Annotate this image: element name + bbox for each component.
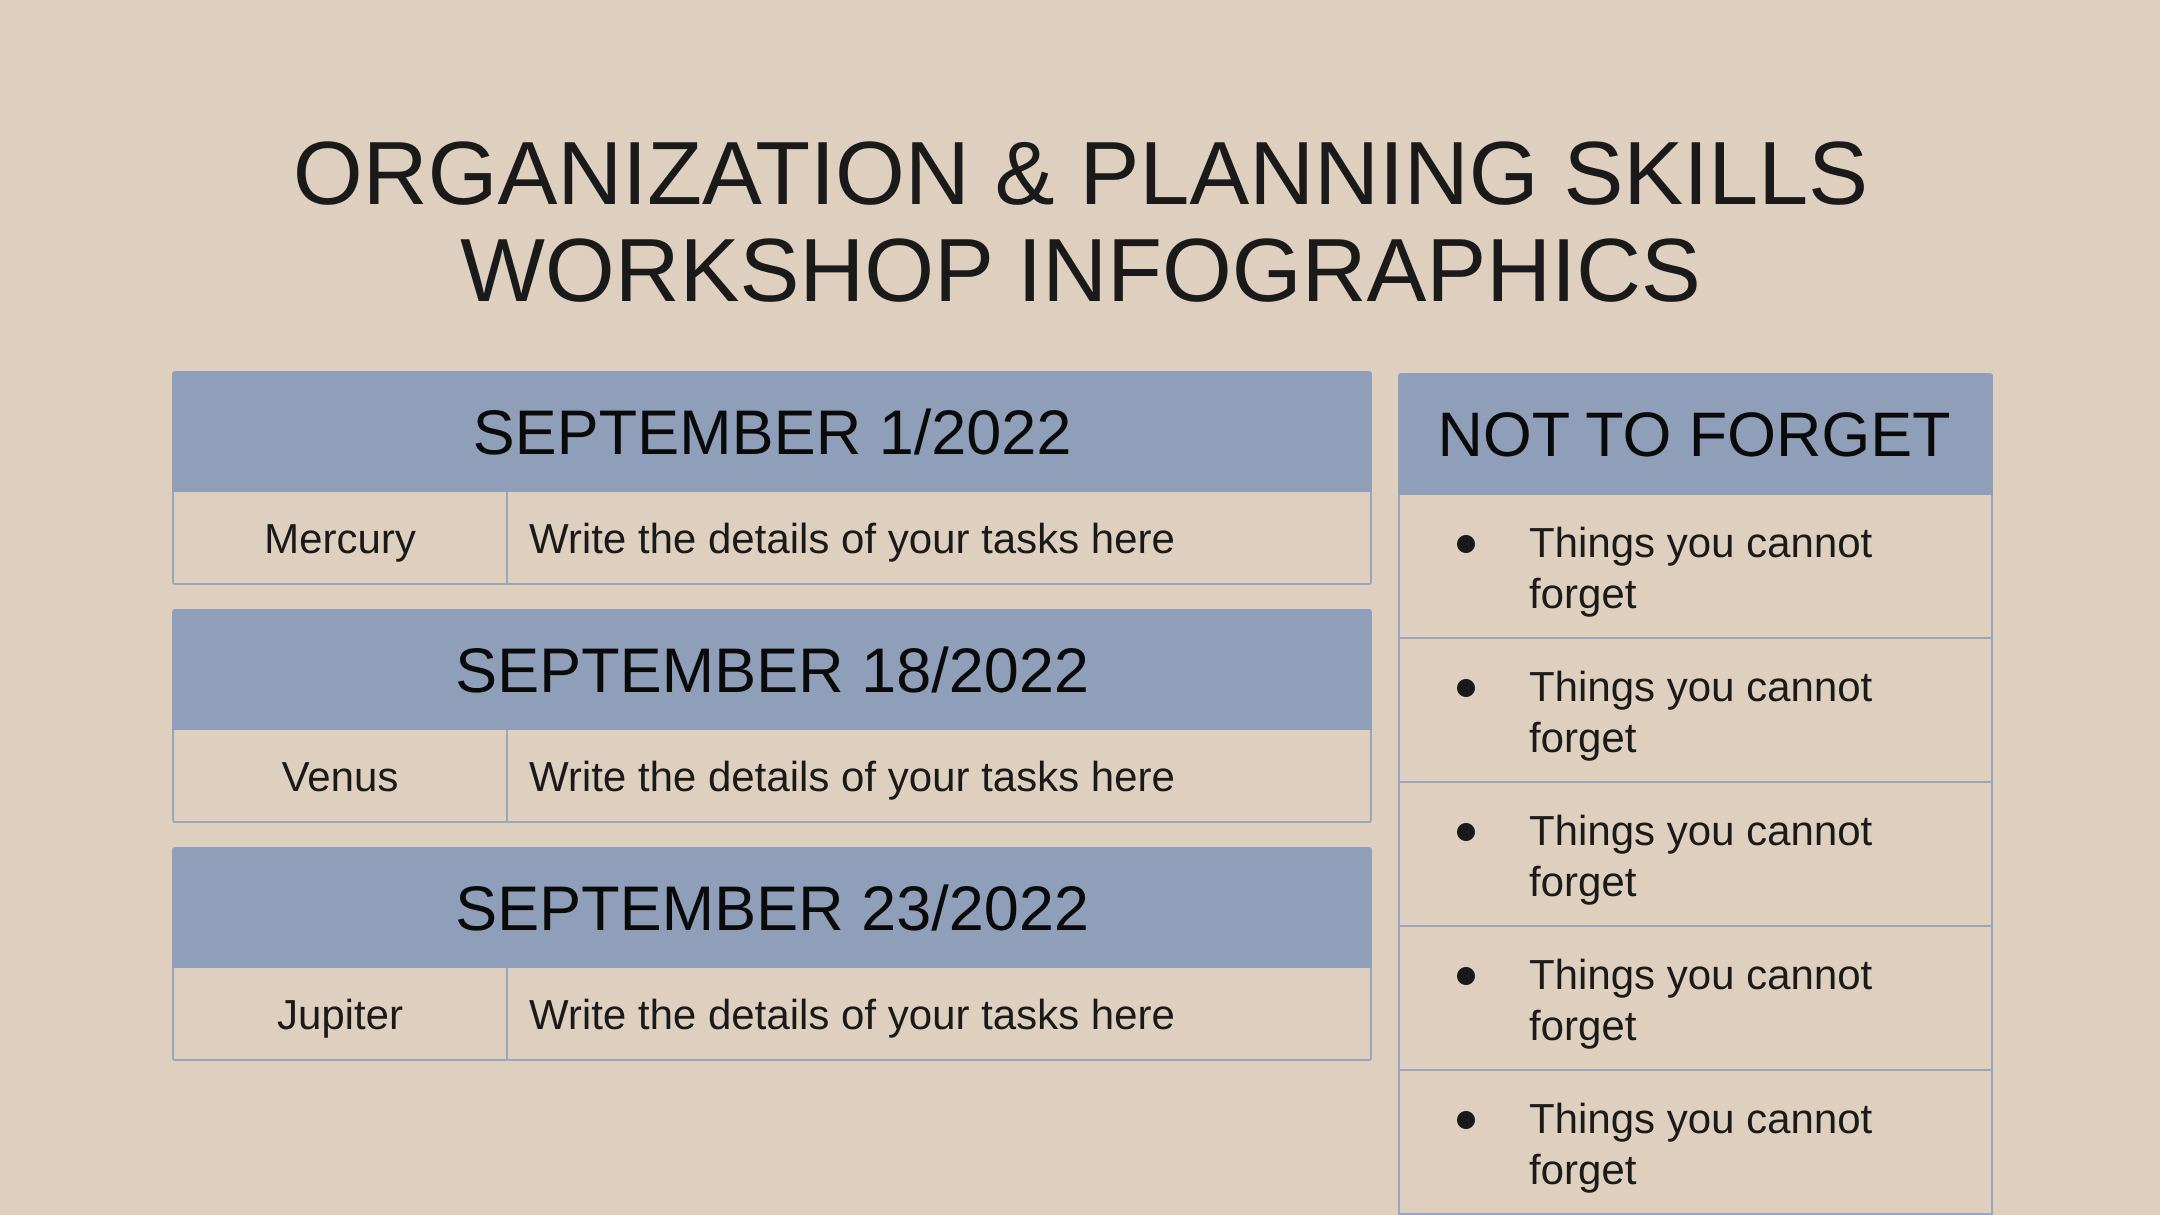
bullet (1457, 967, 1475, 985)
list item 1 (1398, 495, 1993, 639)
label: Venus: Venus (282, 753, 398, 800)
bullet (1457, 1111, 1475, 1129)
title (293, 124, 1868, 320)
item text: forget (1529, 714, 1636, 760)
item text (1529, 951, 1872, 1049)
item text: Things you cannot (1529, 951, 1872, 998)
list item 2 (1398, 639, 1993, 783)
panel: schedule September 18 (172, 609, 1372, 823)
bullet (1457, 823, 1475, 841)
task details: Write the details of your tasks here (529, 515, 1175, 562)
item text (1529, 663, 1872, 761)
item text: Things you cannot (1529, 519, 1872, 566)
item text: forget (1529, 858, 1636, 904)
item text (1529, 519, 1872, 617)
panel: schedule September 23 (172, 847, 1372, 1061)
item text: forget (1529, 1002, 1636, 1048)
item text: Things you cannot (1529, 663, 1872, 710)
item text (1529, 807, 1872, 905)
table row frame (172, 968, 1372, 1061)
column divider (506, 968, 508, 1060)
bullet (1457, 535, 1475, 553)
list item 4 (1398, 927, 1993, 1071)
item text: forget (1529, 570, 1636, 616)
item text (1529, 1095, 1872, 1193)
heading: September 1 (172, 371, 1372, 492)
list item 3 (1398, 783, 1993, 927)
column divider (506, 730, 508, 822)
task details: Write the details of your tasks here (529, 753, 1175, 800)
panel: not to forget (1398, 373, 1993, 1215)
heading: September 23: SEPTEMBER 23/2022 (455, 874, 1089, 944)
column divider (506, 492, 508, 584)
heading: September 23 (172, 847, 1372, 968)
heading: September 18 (172, 609, 1372, 730)
item text: Things you cannot (1529, 1095, 1872, 1142)
bullet (1457, 679, 1475, 697)
heading: not to forget (1398, 373, 1993, 495)
item text: forget (1529, 1146, 1636, 1192)
title: WORKSHOP INFOGRAPHICS (460, 220, 1701, 320)
table row frame (172, 730, 1372, 823)
heading: September 1: SEPTEMBER 1/2022 (473, 398, 1071, 468)
label: Jupiter: Jupiter (277, 991, 403, 1038)
table row frame (172, 492, 1372, 585)
heading: not to forget: NOT TO FORGET (1438, 400, 1950, 470)
list item 5 (1398, 1071, 1993, 1215)
panel: schedule September 1 (172, 371, 1372, 585)
label: Mercury: Mercury (264, 515, 416, 562)
item text: Things you cannot (1529, 807, 1872, 854)
task details: Write the details of your tasks here (529, 991, 1175, 1038)
title: ORGANIZATION & PLANNING SKILLS (293, 124, 1868, 224)
heading: September 18: SEPTEMBER 18/2022 (455, 636, 1089, 706)
